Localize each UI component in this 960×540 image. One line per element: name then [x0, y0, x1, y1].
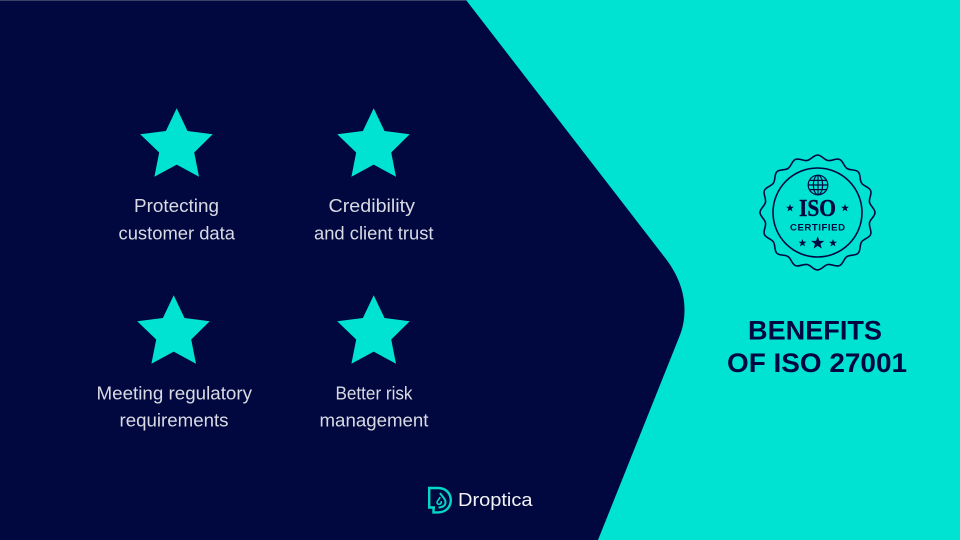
label: meeting regulatory requirements: Meeting regulatory	[96, 382, 253, 404]
icon: star	[137, 295, 210, 364]
icon: star	[337, 108, 410, 177]
benefit: protecting customer data	[118, 108, 236, 244]
badge: ISO certified	[756, 151, 879, 274]
label: credibility and client trust: and client trust	[314, 222, 434, 244]
panel: navy arrow shape	[0, 0, 684, 540]
label: meeting regulatory requirements	[96, 382, 253, 430]
label: credibility and client trust	[314, 195, 434, 244]
benefit: meeting regulatory requirements	[96, 295, 253, 430]
label: better risk management: management	[320, 410, 428, 430]
label: better risk management	[320, 382, 428, 430]
benefit: better risk management	[320, 295, 428, 430]
label: protecting customer data: Protecting	[134, 195, 219, 216]
title: benefits of ISO 27001	[727, 316, 907, 378]
label: meeting regulatory requirements: requirements	[120, 410, 228, 430]
icon: star	[337, 295, 410, 364]
label: protecting customer data: customer data	[118, 222, 236, 244]
CERTIFIED label: CERTIFIED	[790, 223, 845, 234]
title: benefits of ISO 27001: BENEFITS	[748, 316, 882, 346]
icon: star	[140, 108, 213, 177]
wordmark: Droptica	[458, 489, 533, 510]
ISO wordmark: ISO	[799, 196, 836, 222]
label: better risk management: Better risk	[336, 382, 413, 404]
small stars	[786, 204, 849, 249]
icon: globe	[808, 175, 828, 195]
benefit: credibility and client trust	[314, 108, 434, 244]
logo: Droptica	[429, 488, 533, 512]
label: protecting customer data	[118, 195, 236, 244]
title: benefits of ISO 27001: OF ISO 27001	[727, 348, 907, 378]
scalloped outer edge	[756, 151, 879, 274]
label: credibility and client trust: Credibility	[328, 195, 416, 216]
inner ring	[773, 168, 862, 257]
icon: Droptica mark	[429, 488, 451, 512]
